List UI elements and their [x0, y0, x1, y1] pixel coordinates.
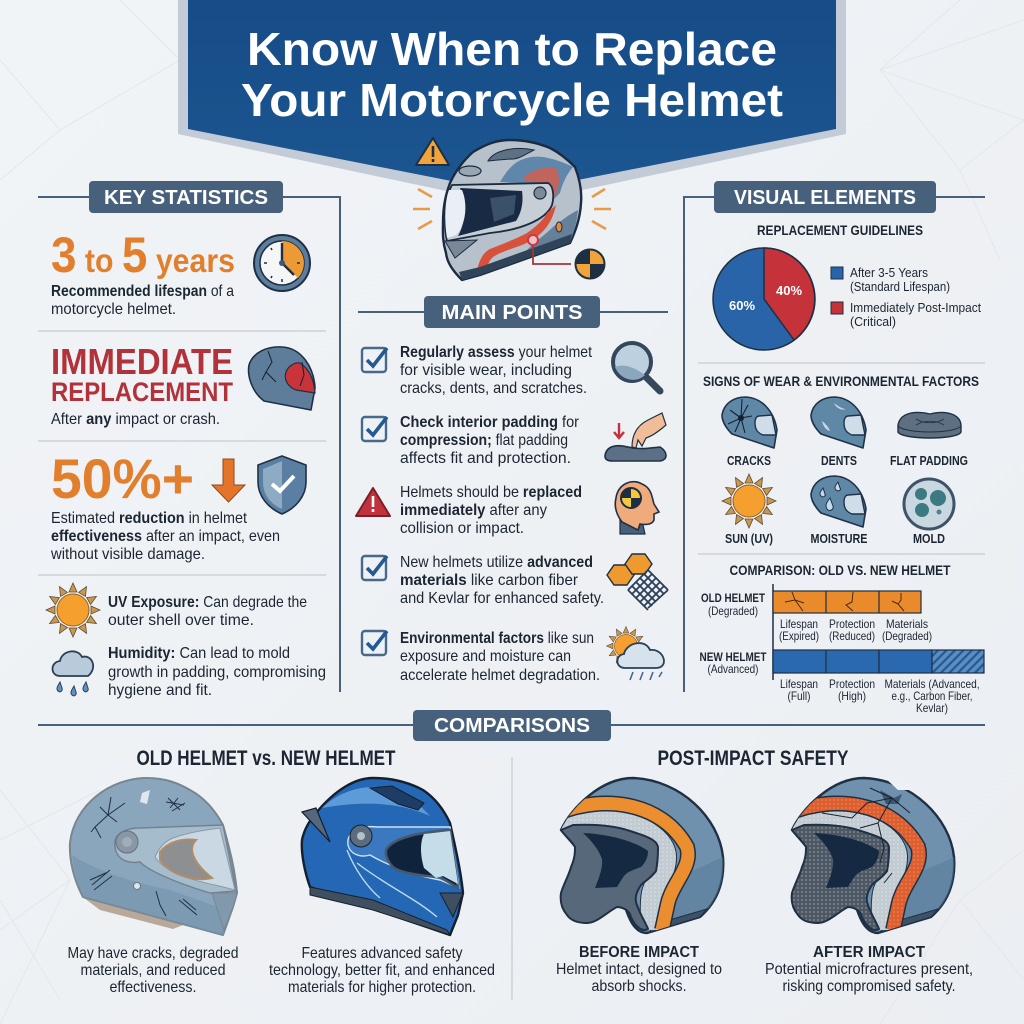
heading: post-impact safety: POST-IMPACT SAFETY	[658, 747, 848, 770]
point: regularly assess: for visible wear, including	[400, 362, 572, 379]
heading: comparisons: COMPARISONS	[434, 715, 590, 737]
panel: comparisons	[38, 710, 985, 1000]
pie chart	[713, 248, 815, 350]
point: interior padding: Check interior padding for	[400, 414, 580, 431]
icon: down arrow	[212, 459, 245, 502]
comparison bar chart: (Expired)	[779, 629, 819, 643]
caption: new helmet: materials for higher protection.	[288, 979, 476, 996]
icon: rain cloud	[52, 651, 93, 696]
panel: key statistics	[38, 181, 340, 699]
comparison bar chart: Materials (Advanced,	[884, 677, 980, 691]
heading: comparisons	[413, 710, 611, 741]
pie chart: 40%	[776, 283, 802, 298]
title banner: Your Motorcycle Helmet	[241, 74, 783, 126]
heading: main points	[424, 296, 600, 328]
caption: old helmet	[68, 945, 238, 996]
icon: magnifier	[613, 343, 660, 391]
point: replace after impact: collision or impact.	[400, 520, 524, 537]
text: lifespan: Recommended lifespan of a	[51, 283, 234, 300]
comparison bar chart: Materials	[886, 617, 928, 631]
icon: head with crash marker	[615, 482, 659, 534]
point: environmental factors	[362, 630, 600, 684]
illustration: before impact helmet	[555, 778, 723, 933]
title banner	[178, 0, 846, 205]
icon: moisture: MOISTURE	[810, 531, 868, 546]
point: environmental factors: accelerate helmet degradation.	[400, 667, 600, 684]
icon: damaged helmet	[249, 347, 315, 410]
icon: clock	[254, 235, 310, 291]
point: replace after impact: immediately after any	[400, 502, 547, 519]
point: regularly assess: cracks, dents, and scratches.	[400, 380, 587, 397]
icon: sun	[46, 583, 100, 637]
text: lifespan	[51, 283, 234, 318]
heading: old vs new: OLD HELMET vs. NEW HELMET	[136, 747, 396, 770]
comparison bar chart: Protection	[829, 617, 875, 631]
text: uv exposure: outer shell over time.	[108, 612, 254, 629]
caption: old helmet: May have cracks, degraded	[68, 945, 238, 962]
stat: immediate replacement: IMMEDIATE	[51, 341, 233, 382]
pie chart: 60%	[729, 298, 755, 313]
comparison bar chart	[700, 584, 984, 715]
comparison bar chart: e.g., Carbon Fiber,	[892, 689, 972, 703]
caption: before impact: absorb shocks.	[592, 978, 686, 995]
text: humidity: hygiene and fit.	[108, 682, 212, 699]
panel: visual elements	[684, 181, 985, 715]
icon: sun and cloud	[607, 627, 664, 680]
text: reduction	[50, 510, 280, 563]
point: new materials: and Kevlar for enhanced safety.	[400, 590, 604, 607]
point: new materials	[362, 554, 604, 607]
point: new materials: materials like carbon fiber	[400, 572, 579, 589]
caption: before impact: BEFORE IMPACT	[579, 944, 699, 961]
point: interior padding	[362, 414, 580, 467]
comparison bar chart: Kevlar)	[916, 701, 948, 715]
caption: old helmet: materials, and reduced	[80, 962, 226, 979]
comparison bar chart: NEW HELMET	[700, 650, 767, 664]
comparison bar chart: (Advanced)	[708, 662, 758, 676]
stat: 3 to 5 years: 3 to 5 years	[51, 227, 235, 283]
legend: (Standard Lifespan)	[850, 279, 950, 294]
heading: visual elements: VISUAL ELEMENTS	[734, 187, 916, 209]
point: regularly assess: Regularly assess your helmet	[400, 344, 592, 361]
text: humidity: growth in padding, compromising	[108, 664, 326, 681]
icon: dents	[811, 397, 866, 468]
text: reduction: Estimated reduction in helmet	[51, 510, 247, 527]
icon: cracks	[722, 397, 777, 468]
caption: after impact: AFTER IMPACT	[813, 944, 925, 961]
caption: new helmet: Features advanced safety	[302, 945, 462, 962]
legend: (Critical)	[850, 314, 896, 329]
icon: cracks: CRACKS	[727, 453, 771, 468]
legend: Immediately Post-Impact	[850, 300, 981, 315]
point: environmental factors: exposure and moisture can	[400, 648, 571, 665]
icon: mold: MOLD	[913, 531, 945, 546]
icon: padding press	[605, 413, 666, 461]
stat: immediate replacement: REPLACEMENT	[51, 377, 233, 407]
point: regularly assess	[362, 344, 592, 397]
text: uv exposure	[108, 594, 307, 629]
illustration: old helmet	[70, 778, 237, 935]
illustration: after impact helmet	[786, 777, 954, 933]
point: interior padding: compression; flat padding	[400, 432, 568, 449]
icon: moisture	[810, 476, 868, 546]
text: after impact: After any impact or crash.	[51, 411, 220, 428]
icon: shield	[258, 456, 306, 514]
icon: sun uv	[722, 474, 776, 546]
caption: new helmet	[269, 945, 495, 996]
comparison bar chart: Lifespan	[780, 677, 818, 691]
heading: replacement guidelines: REPLACEMENT GUIDELINES	[757, 222, 923, 238]
caption: before impact: Helmet intact, designed to	[556, 961, 722, 978]
heading: visual elements	[714, 181, 936, 213]
title banner: Know When to Replace	[247, 23, 777, 75]
hero helmet	[413, 140, 611, 280]
legend: After 3-5 Years	[850, 265, 928, 280]
point: replace after impact: Helmets should be replaced	[400, 484, 582, 501]
icon: mold	[904, 479, 954, 546]
caption: after impact	[765, 944, 973, 995]
caption: after impact: Potential microfractures present,	[765, 961, 973, 978]
comparison bar chart: (Full)	[788, 689, 811, 703]
point: replace after impact	[356, 484, 582, 537]
heading: key statistics: KEY STATISTICS	[104, 187, 268, 209]
comparison bar chart: OLD HELMET	[701, 591, 766, 605]
comparison bar chart: (Degraded)	[882, 629, 932, 643]
text: uv exposure: UV Exposure: Can degrade the	[108, 594, 307, 611]
heading: comparison chart: COMPARISON: OLD VS. NEW HELMET	[730, 562, 951, 578]
text: humidity: Humidity: Can lead to mold	[108, 645, 290, 662]
text: reduction: effectiveness after an impact, even	[51, 528, 280, 545]
comparison bar chart: (Reduced)	[829, 629, 875, 643]
icon: crash marker	[528, 235, 604, 278]
heading: key statistics	[89, 181, 283, 213]
icon: warning triangle	[416, 138, 449, 165]
icon: hex materials	[607, 554, 668, 610]
point: new materials: New helmets utilize advanced	[400, 554, 593, 571]
heading: signs of wear: SIGNS OF WEAR & ENVIRONMENTAL FACTORS	[703, 373, 979, 389]
point: interior padding: affects fit and protection.	[400, 450, 571, 467]
comparison bar chart: Lifespan	[780, 617, 818, 631]
heading: main points: MAIN POINTS	[442, 302, 582, 324]
text: reduction: without visible damage.	[50, 546, 205, 563]
stat: 50 percent: 50%+	[51, 447, 194, 510]
text: lifespan: motorcycle helmet.	[51, 301, 176, 318]
caption: old helmet: effectiveness.	[110, 979, 196, 996]
legend	[831, 265, 981, 329]
caption: new helmet: technology, better fit, and enhanced	[269, 962, 495, 979]
stat: immediate replacement	[51, 341, 233, 407]
comparison bar chart: (High)	[838, 689, 866, 703]
caption: after impact: risking compromised safety.	[782, 978, 956, 995]
comparison bar chart: (Degraded)	[708, 604, 758, 618]
caption: before impact	[556, 944, 722, 995]
icon: sun uv: SUN (UV)	[725, 531, 773, 546]
panel: main points	[356, 296, 668, 684]
illustration: new helmet	[302, 778, 463, 935]
icon: flat padding	[890, 412, 968, 468]
point: environmental factors: Environmental factors like sun	[400, 630, 594, 647]
icon: flat padding: FLAT PADDING	[890, 453, 968, 468]
comparison bar chart: Protection	[829, 677, 875, 691]
icon: dents: DENTS	[821, 453, 857, 468]
text: humidity	[108, 645, 326, 699]
